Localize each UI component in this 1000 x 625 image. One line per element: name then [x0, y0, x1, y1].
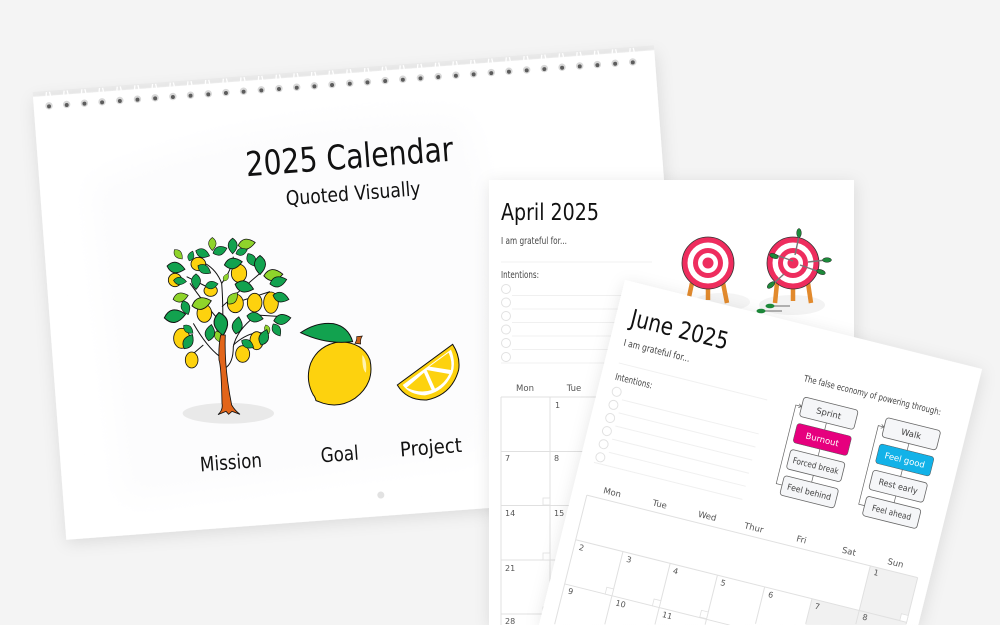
calendar grid: June: 1	[873, 568, 880, 578]
icon: lemon tree, lemon and slice	[163, 237, 459, 424]
calendar grid: April: 21	[505, 564, 515, 573]
calendar grid: April: Tue	[566, 384, 581, 394]
calendar grid: June: Fri	[795, 534, 807, 546]
calendar grid: April: 7	[505, 454, 510, 463]
calendar grid: June: 8	[861, 613, 869, 623]
label: goal: Goal	[320, 441, 359, 467]
calendar grid: June: 9	[567, 587, 574, 597]
icon: empty target	[682, 237, 750, 311]
gratitude line	[619, 363, 767, 400]
label: mission: Mission	[199, 448, 263, 476]
intentions label: Intentions:	[614, 372, 653, 392]
box: feel good: Feel good	[883, 451, 926, 471]
tree shadow	[183, 403, 274, 424]
icon: lemon slice	[397, 344, 459, 400]
panel: calendar cover	[33, 46, 688, 540]
gratitude prompt: I am grateful for...	[622, 338, 691, 365]
heading: April 2025: April 2025	[501, 200, 599, 226]
gratitude prompt: I am grateful for...	[501, 236, 567, 247]
calendar grid: April: 22	[554, 564, 564, 573]
calendar grid: June: 5	[720, 578, 727, 588]
gratitude line	[501, 261, 652, 263]
calendar grid: June: Tue	[650, 498, 668, 512]
box: feel ahead: Feel ahead	[871, 504, 912, 523]
box: walk: Walk	[900, 427, 922, 442]
panel: April page	[489, 180, 854, 625]
calendar grid: April: 15	[554, 509, 564, 518]
calendar grid: June: 7	[814, 602, 821, 612]
flow: walking	[856, 416, 941, 529]
calendar grid: June: 6	[767, 590, 774, 600]
diagram heading: The false economy of powering through:	[802, 374, 942, 418]
leaves	[163, 237, 292, 351]
box: forced break: Forced break	[791, 456, 840, 477]
calendar grid: June: 10	[615, 598, 627, 610]
trunk	[218, 335, 240, 415]
subtitle: Quoted Visually	[285, 176, 421, 210]
calendar grid: June: 3	[625, 555, 633, 565]
panel: June page	[539, 280, 982, 625]
hanging hole	[377, 491, 385, 499]
box: feel behind: Feel behind	[786, 483, 832, 503]
label: project: Project	[399, 433, 463, 461]
icon: lemon tree	[163, 237, 292, 415]
calendar grid: April: 8	[554, 454, 559, 463]
spiral binding	[44, 48, 637, 110]
calendar grid: April	[501, 384, 844, 625]
flow: powering through	[774, 395, 858, 508]
intentions list	[594, 386, 761, 499]
calendar grid: June: Sun	[886, 557, 904, 571]
title: 2025 Calendar	[244, 130, 455, 185]
calendar grid: April: 1	[555, 401, 560, 410]
lemons	[168, 257, 278, 368]
calendar grid: June: Wed	[697, 510, 717, 524]
calendar grid: June: 4	[672, 566, 679, 576]
intentions label: Intentions:	[501, 270, 539, 281]
box: burnout: Burnout	[804, 431, 840, 450]
calendar grid: June	[555, 483, 921, 625]
icon: target with darts	[756, 228, 832, 315]
intentions list	[501, 284, 652, 363]
heading: June 2025: June 2025	[626, 304, 732, 355]
calendar grid: June: Mon	[602, 486, 622, 500]
calendar grid: June: 11	[661, 610, 673, 621]
icon: lemon	[301, 323, 371, 405]
calendar grid: April: 14	[505, 509, 515, 518]
box: sprint: Sprint	[815, 406, 843, 422]
calendar grid: April: Mon	[516, 384, 534, 394]
calendar grid: June: 2	[578, 543, 585, 553]
box: rest early: Rest early	[877, 478, 919, 497]
calendar grid: June: Sat	[841, 546, 857, 559]
calendar grid: June: Thur	[742, 521, 765, 536]
